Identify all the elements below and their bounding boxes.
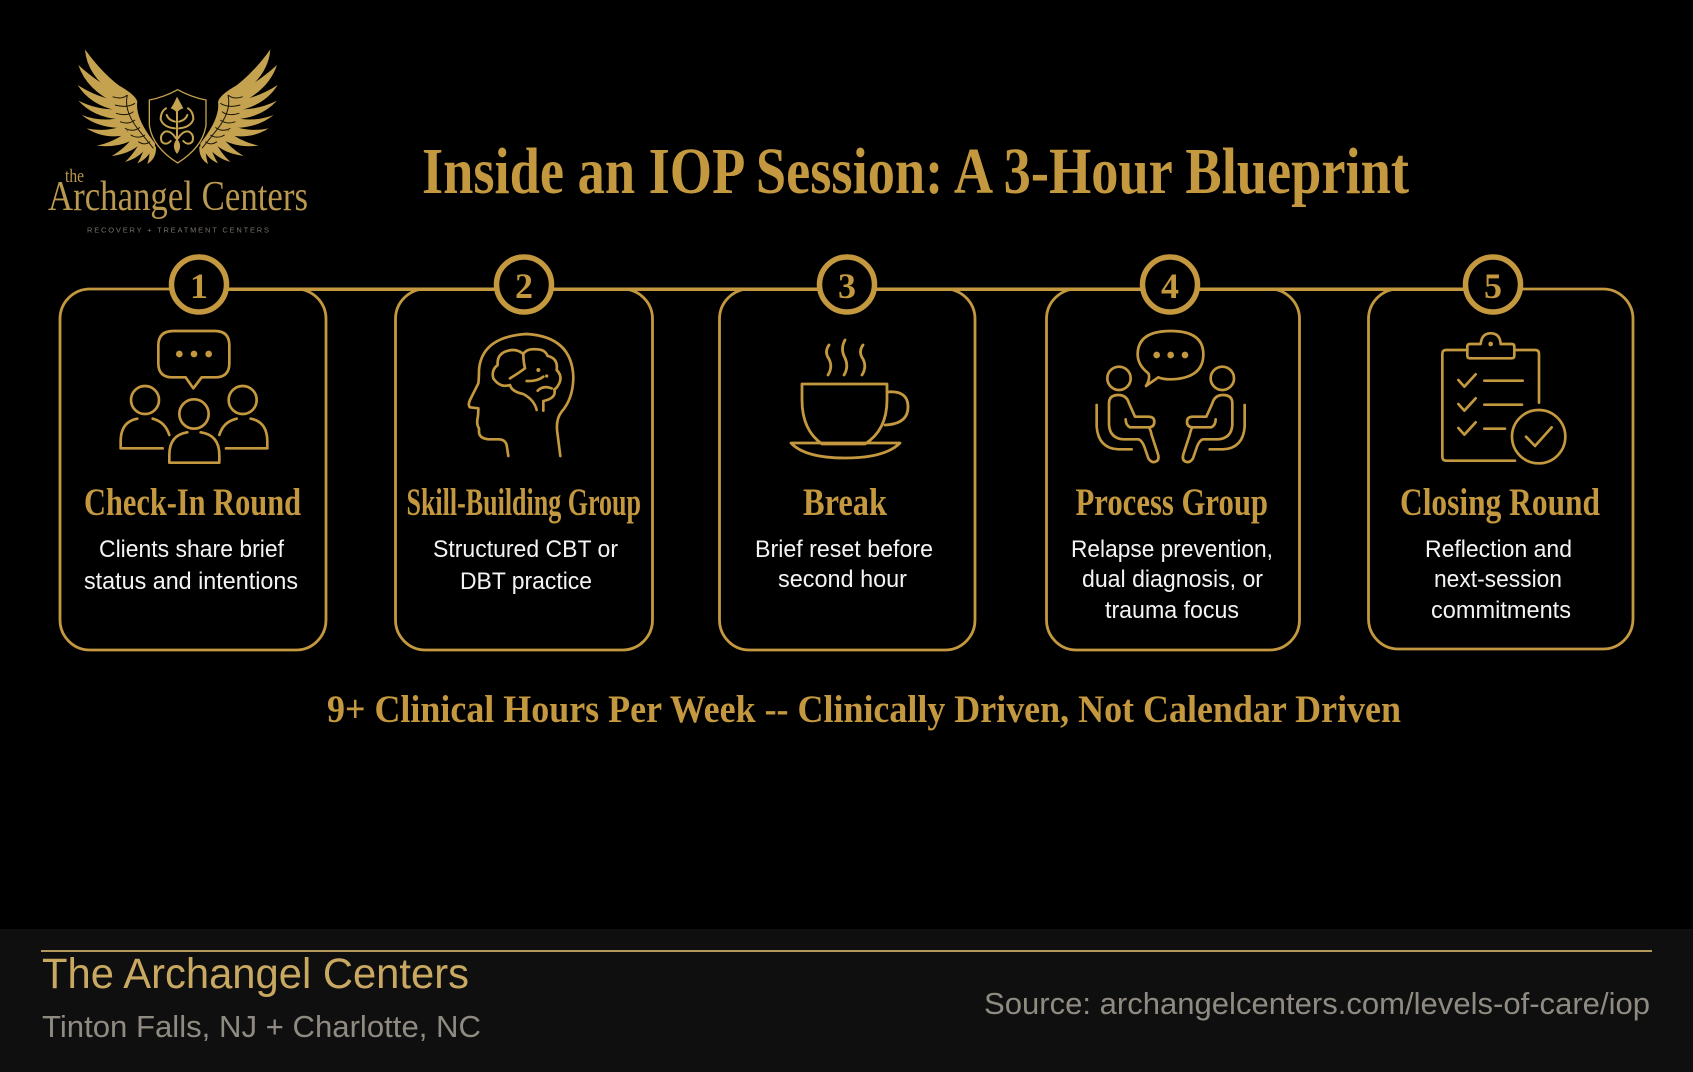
description: next-session [1434, 566, 1562, 593]
panel: step 2 skill-building group [396, 257, 652, 650]
logo: The Archangel Centers [48, 49, 308, 235]
heading: Closing Round [1400, 481, 1600, 524]
description [1425, 536, 1572, 624]
heading: Skill-Building Group [406, 481, 641, 524]
subheading callout: 9+ Clinical Hours Per Week -- Clinically Driven, Not Calendar Driven [327, 688, 1401, 731]
card outline [60, 289, 326, 650]
footer locations: Tinton Falls, NJ + Charlotte, NC [42, 1009, 481, 1044]
description: trauma focus [1105, 597, 1239, 624]
description [433, 536, 618, 595]
icon: group speaking [121, 331, 267, 463]
title: Inside an IOP Session: A 3-Hour Blueprint [422, 135, 1409, 208]
description: second hour [778, 566, 907, 593]
heading: Break [803, 481, 887, 524]
number badge 4: 4 [1161, 266, 1179, 306]
description [755, 536, 933, 593]
logo wordmark: Archangel Centers: Archangel Centers [48, 174, 308, 220]
panel: step 5 closing round [1368, 257, 1633, 649]
card outline [720, 289, 975, 650]
footer organisation name: The Archangel Centers [42, 950, 469, 998]
footer source: Source: archangelcenters.com/levels-of-care/iop [984, 986, 1650, 1021]
icon: clipboard checklist [1442, 333, 1565, 463]
description: Relapse prevention, [1071, 536, 1273, 563]
description: Brief reset before [755, 536, 933, 563]
number badge 5: 5 [1484, 266, 1502, 306]
panel: step 4 process group [1046, 257, 1300, 650]
card outline [396, 289, 652, 650]
description: commitments [1431, 597, 1571, 624]
logo wordmark: the: the [65, 166, 84, 187]
description: Structured CBT or [433, 536, 618, 563]
panel: step 1 check-in round [60, 257, 326, 650]
description: status and intentions [84, 568, 298, 595]
description: Reflection and [1425, 536, 1572, 563]
panel: step 3 break [720, 257, 975, 650]
icon: steaming coffee cup [791, 340, 908, 458]
description [84, 536, 298, 595]
footer band [0, 929, 1693, 1072]
number badge 5 [1466, 257, 1520, 312]
number badge 3: 3 [838, 266, 856, 306]
description: Clients share brief [99, 536, 284, 563]
number badge 1 [172, 257, 226, 312]
icon: winged shield emblem [78, 49, 278, 164]
number badge 2: 2 [515, 266, 533, 306]
card outline [1046, 289, 1300, 650]
icon: two people talking [1097, 331, 1245, 462]
icon: head with brain [469, 334, 573, 456]
description: dual diagnosis, or [1082, 566, 1263, 593]
number badge 1: 1 [190, 266, 208, 306]
number badge 3 [820, 257, 874, 312]
timeline connector [199, 288, 1493, 291]
description: DBT practice [460, 568, 592, 595]
number badge 2 [496, 257, 552, 312]
card outline [1368, 289, 1633, 649]
description [1071, 536, 1273, 624]
heading: Process Group [1076, 481, 1268, 524]
number badge 4 [1142, 257, 1198, 312]
heading: Check-In Round [84, 481, 301, 524]
logo tagline: RECOVERY + TREATMENT CENTERS [87, 226, 269, 234]
